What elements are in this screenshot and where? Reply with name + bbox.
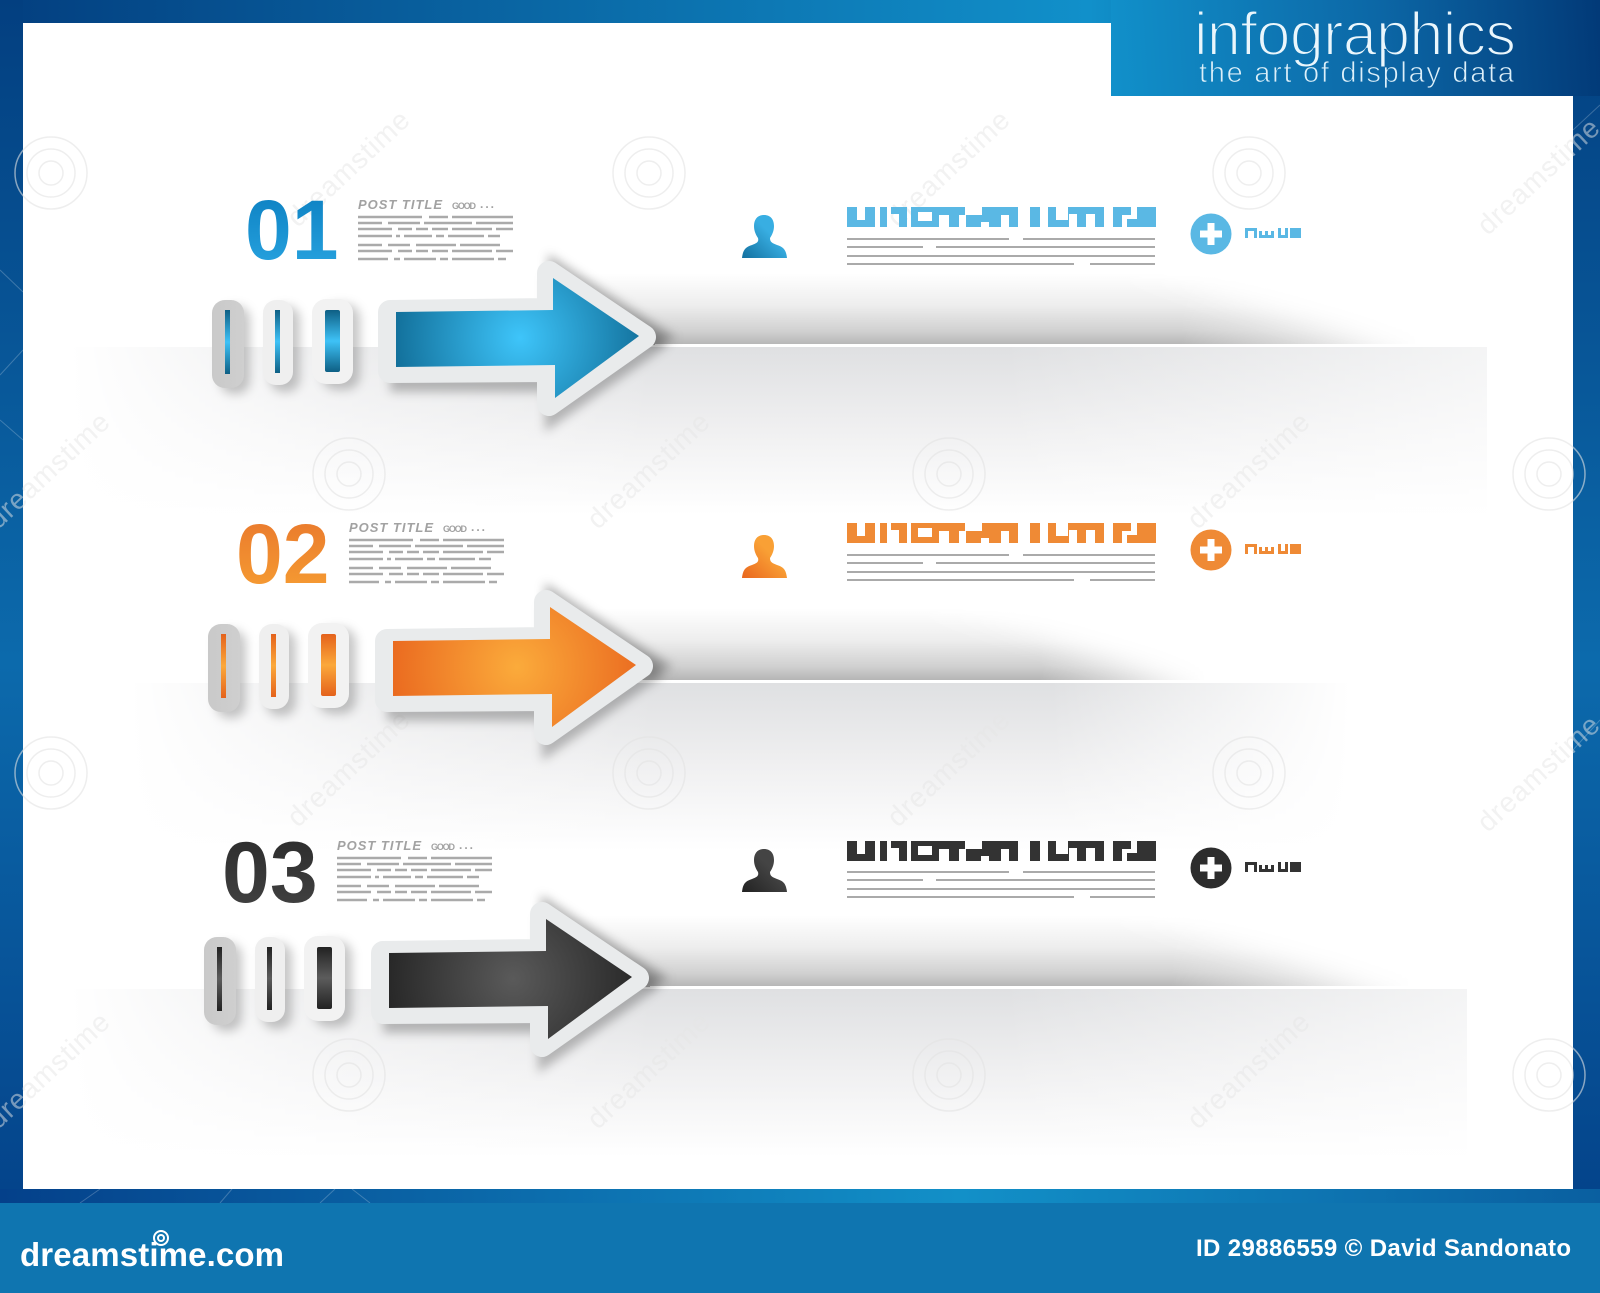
arrow shadow bbox=[390, 275, 668, 432]
subtitle: the art of display data: the art of display data bbox=[1199, 57, 1515, 89]
arrow peel shadow bbox=[548, 254, 676, 345]
arrow outline bbox=[383, 914, 637, 1045]
pill shadows bbox=[220, 304, 360, 394]
pill 1 bbox=[208, 624, 240, 712]
footer logo spiral bbox=[154, 1231, 168, 1245]
watermark: dreamstime bbox=[881, 703, 1016, 833]
step 01 person icon bbox=[742, 215, 787, 258]
step 03 person icon bbox=[742, 849, 787, 892]
watermark: dreamstime bbox=[1181, 1005, 1316, 1135]
step 01 text block bbox=[358, 197, 513, 259]
step 03 arrow bbox=[383, 895, 669, 1073]
arrow outline bbox=[387, 602, 641, 733]
step 01 greeked title bbox=[847, 207, 1156, 227]
step 02 small label bbox=[1245, 544, 1301, 554]
arrow shadow bbox=[383, 916, 661, 1073]
pill 3 bbox=[304, 936, 345, 1021]
pill 1 bbox=[212, 300, 244, 388]
pill 2 bbox=[263, 300, 293, 385]
watermark: dreamstime bbox=[881, 103, 1016, 233]
watermark: dreamstime bbox=[581, 405, 716, 535]
step 02 pills bbox=[208, 623, 356, 718]
step 01 small label bbox=[1245, 228, 1301, 238]
step 03 pills bbox=[204, 936, 352, 1031]
step 01 text block: POST TITLE bbox=[358, 197, 442, 212]
pill 3 bbox=[308, 623, 349, 708]
header tab bbox=[1111, 0, 1600, 96]
step 02 description lines bbox=[847, 555, 1155, 580]
pill shadows bbox=[216, 628, 356, 718]
step 02 text block: GOOD bbox=[443, 524, 468, 534]
step 03 plus button bbox=[1190, 848, 1232, 888]
arrow fill bbox=[389, 919, 632, 1039]
pill 2 bbox=[255, 937, 285, 1022]
step 03 number: 03 bbox=[222, 825, 318, 921]
step 01 pills bbox=[212, 299, 360, 394]
arrow fill bbox=[393, 607, 636, 727]
step 01 text block: GOOD bbox=[452, 201, 476, 211]
ledge panel row 3 bbox=[194, 930, 1467, 1112]
title: infographics: infographics bbox=[1194, 0, 1516, 68]
arrow shadow bbox=[387, 604, 665, 761]
step 02 text block: POST TITLE bbox=[349, 520, 433, 535]
step 03 text block: GOOD bbox=[431, 842, 456, 852]
watermark: dreamstime bbox=[1181, 405, 1316, 535]
step 03 text block: POST TITLE bbox=[337, 838, 421, 853]
step 02 greeked title bbox=[847, 523, 1156, 543]
arrow outline bbox=[390, 273, 644, 404]
footer bar bbox=[0, 1203, 1600, 1293]
step 01 plus button bbox=[1190, 214, 1232, 254]
step 01 number: 01 bbox=[245, 183, 338, 277]
step 02 text block bbox=[349, 520, 504, 582]
step 02 number: 02 bbox=[236, 507, 329, 601]
watermark: dreamstime bbox=[281, 703, 416, 833]
step 01 arrow bbox=[390, 254, 676, 432]
pill 3 bbox=[312, 299, 353, 384]
pill shadows bbox=[212, 941, 352, 1031]
footer credit: ID 29886559 © David Sandonato bbox=[1196, 1235, 1571, 1262]
step 02 plus button bbox=[1190, 530, 1232, 570]
ledge panel row 2 bbox=[249, 624, 1274, 806]
footer logo text: dreamstime.com bbox=[20, 1236, 284, 1273]
arrow peel shadow bbox=[545, 583, 673, 674]
step 02 arrow bbox=[387, 583, 673, 761]
pill 1 bbox=[204, 937, 236, 1025]
step 01 text block: ... bbox=[480, 197, 494, 211]
watermark: dreamstime bbox=[281, 103, 416, 233]
arrow fill bbox=[396, 278, 639, 398]
ledge panel row 1 bbox=[194, 288, 1487, 470]
pill 2 bbox=[259, 624, 289, 709]
step 03 text block: ... bbox=[459, 838, 473, 852]
arrow peel shadow bbox=[541, 895, 669, 986]
step 03 greeked title bbox=[847, 841, 1156, 861]
step 03 text block bbox=[337, 838, 492, 900]
step 02 person icon bbox=[742, 535, 787, 578]
step 01 description lines bbox=[847, 239, 1155, 264]
watermark bbox=[0, 103, 1600, 1135]
step 03 small label bbox=[1245, 862, 1301, 872]
step 02 text block: ... bbox=[471, 520, 485, 534]
watermark: dreamstime bbox=[581, 1005, 716, 1135]
step 03 description lines bbox=[847, 872, 1155, 897]
